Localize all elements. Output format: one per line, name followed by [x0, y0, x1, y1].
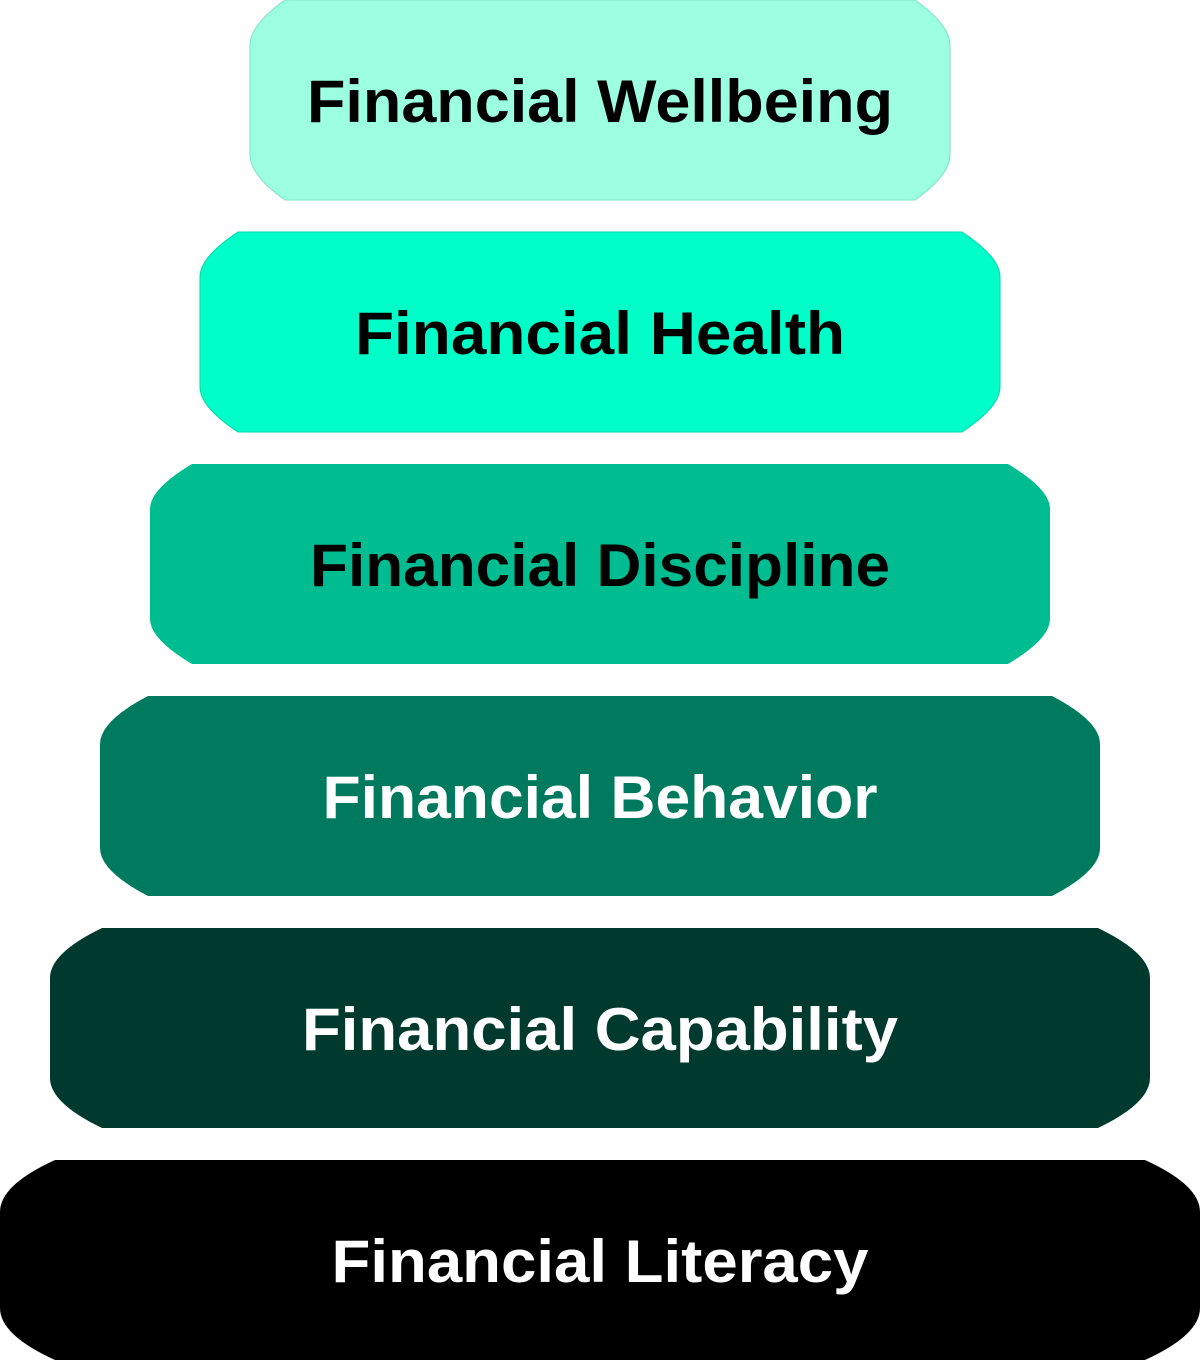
- tier: Financial Behavior: [100, 696, 1100, 896]
- tier: Financial Capability: Financial Capability: [302, 996, 899, 1063]
- tier: Financial Capability: [50, 928, 1150, 1128]
- tier: Financial Health: Financial Health: [355, 300, 845, 367]
- tier: Financial Wellbeing: Financial Wellbeing: [307, 68, 893, 135]
- tier: Financial Wellbeing: [250, 0, 950, 200]
- tier: Financial Literacy: [0, 1160, 1200, 1360]
- tier: Financial Discipline: [150, 464, 1050, 664]
- tier: Financial Literacy: Financial Literacy: [332, 1228, 869, 1295]
- tier: Financial Discipline: Financial Discipline: [310, 532, 890, 599]
- tier: Financial Health: [200, 232, 1000, 432]
- tier: Financial Behavior: Financial Behavior: [322, 764, 878, 831]
